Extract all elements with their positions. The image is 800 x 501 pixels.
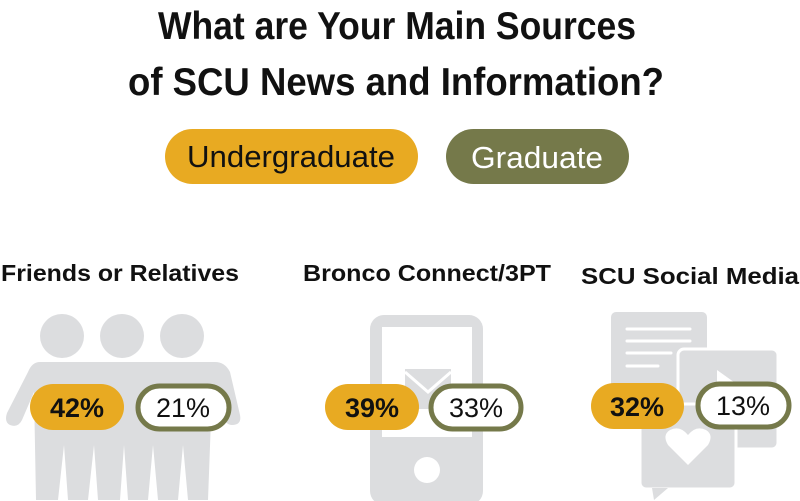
heading: friends: Friends or Relatives: [1, 260, 239, 286]
pill: 39% undergraduate: [325, 384, 419, 430]
icon: phone: [370, 315, 483, 501]
legend: undergraduate: Undergraduate: [187, 139, 395, 174]
panel: bronco connect: [303, 260, 551, 501]
pill: 33% graduate: 33%: [449, 393, 503, 423]
title: of SCU News and Information?: [128, 61, 664, 104]
heading: bronco connect: Bronco Connect/3PT: [303, 260, 551, 286]
pill: 32% undergraduate: [591, 383, 684, 429]
pill: 39% undergraduate: 39%: [345, 393, 399, 423]
heading: social media: SCU Social Media: [581, 263, 799, 289]
legend: graduate: [446, 129, 629, 184]
pill: 21% graduate: [138, 386, 229, 429]
pill: 21% graduate: 21%: [156, 393, 210, 423]
title: [128, 5, 664, 104]
icon: people: [6, 314, 240, 500]
panel: friends or relatives: [1, 260, 240, 500]
legend: [165, 129, 629, 184]
pill: 42% undergraduate: 42%: [50, 393, 104, 423]
panel: scu social media: [581, 263, 799, 500]
pill: 32% undergraduate: 32%: [610, 392, 664, 422]
legend: graduate: Graduate: [471, 140, 603, 175]
pill: 42% undergraduate: [30, 384, 124, 430]
title: What are Your Main Sources: [158, 5, 636, 48]
icon: chat bubbles: [611, 312, 778, 500]
pill: 33% graduate: [431, 386, 521, 429]
pill: 13% graduate: [698, 384, 789, 427]
pill: 13% graduate: 13%: [716, 391, 770, 421]
legend: undergraduate: [165, 129, 418, 184]
